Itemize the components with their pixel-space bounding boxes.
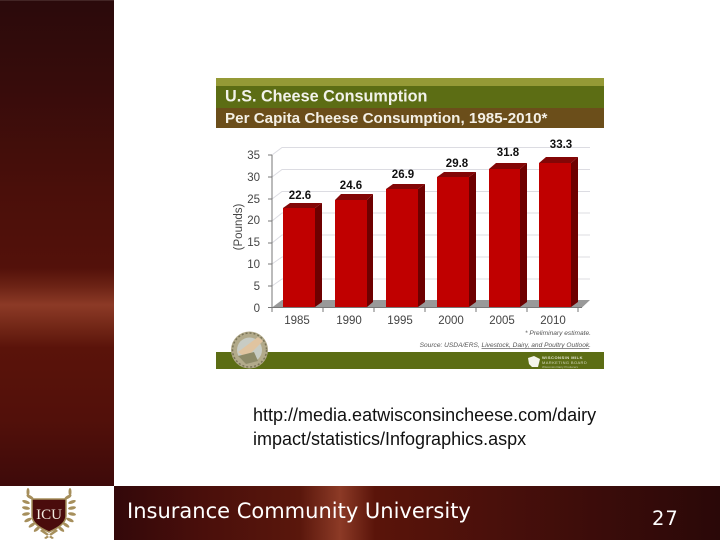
bar 2010: [539, 157, 578, 307]
crest initials: ICU: [36, 507, 62, 523]
icon: seal: [231, 332, 268, 368]
value labels: 22.6: [289, 190, 311, 202]
bar 1985: [283, 203, 322, 307]
value labels: 24.6: [340, 180, 362, 192]
laurel wreath: [22, 488, 76, 539]
footer bar: [114, 486, 720, 540]
footnote: * Preliminary estimate.: [525, 330, 591, 337]
y axis labels: [247, 150, 260, 315]
axes: [268, 155, 582, 312]
x axis labels: [284, 315, 566, 327]
y axis labels: 25: [247, 194, 260, 206]
value labels: 31.8: [497, 147, 520, 159]
y axis labels: 30: [247, 172, 260, 184]
y axis labels: 5: [254, 281, 260, 293]
citation text: http://media.eatwisconsincheese.com/dairy: [253, 405, 596, 425]
bar 2005: [489, 163, 527, 307]
value labels: [289, 139, 572, 202]
citation text: [253, 405, 596, 449]
icon: ICU crest: [22, 488, 76, 539]
x axis labels: 2010: [540, 315, 566, 327]
page number: 27: [652, 507, 679, 530]
bar 1995: [386, 184, 425, 307]
bar 2000: [437, 172, 476, 307]
sidebar panel: [0, 0, 114, 486]
gridlines: [272, 148, 590, 286]
floor: [272, 300, 590, 308]
logo: Wisconsin Milk Marketing Board: WISCONSIN MILK: [542, 355, 583, 360]
value labels: 29.8: [446, 158, 469, 170]
chart subtitle: Per Capita Cheese Consumption, 1985-2010*: [225, 110, 548, 127]
chart title: U.S. Cheese Consumption: [225, 88, 427, 106]
y axis labels: 15: [247, 237, 260, 249]
y axis labels: 20: [247, 215, 260, 227]
x axis labels: 1985: [284, 315, 310, 327]
x axis labels: 1995: [387, 315, 413, 327]
y axis title: (Pounds): [233, 204, 245, 250]
citation text: impact/statistics/Infographics.aspx: [253, 429, 526, 449]
value labels: 26.9: [392, 169, 414, 181]
logo: Wisconsin Milk Marketing Board: [528, 355, 587, 369]
chart footer band: [216, 352, 604, 369]
bar 1990: [335, 194, 373, 307]
shield: [32, 499, 66, 532]
bar chart: [233, 139, 590, 327]
y axis labels: 10: [247, 259, 260, 271]
x axis labels: 2005: [489, 315, 515, 327]
x axis labels: 2000: [438, 315, 464, 327]
chart image panel: [216, 78, 604, 369]
source line: Source: USDA/ERS, Livestock, Dairy, and Poultry Outlook.: [420, 342, 591, 349]
footer title: Insurance Community University: [127, 499, 471, 523]
x axis labels: 1990: [336, 315, 362, 327]
logo: Wisconsin Milk Marketing Board: MARKETING BOARD: [542, 360, 587, 365]
y axis labels: 0: [254, 303, 260, 315]
logo: Wisconsin Milk Marketing Board: Wisconsin Dairy Producers: [542, 365, 579, 369]
value labels: 33.3: [550, 139, 572, 151]
y axis labels: 35: [247, 150, 260, 162]
chart header band: [216, 78, 604, 128]
